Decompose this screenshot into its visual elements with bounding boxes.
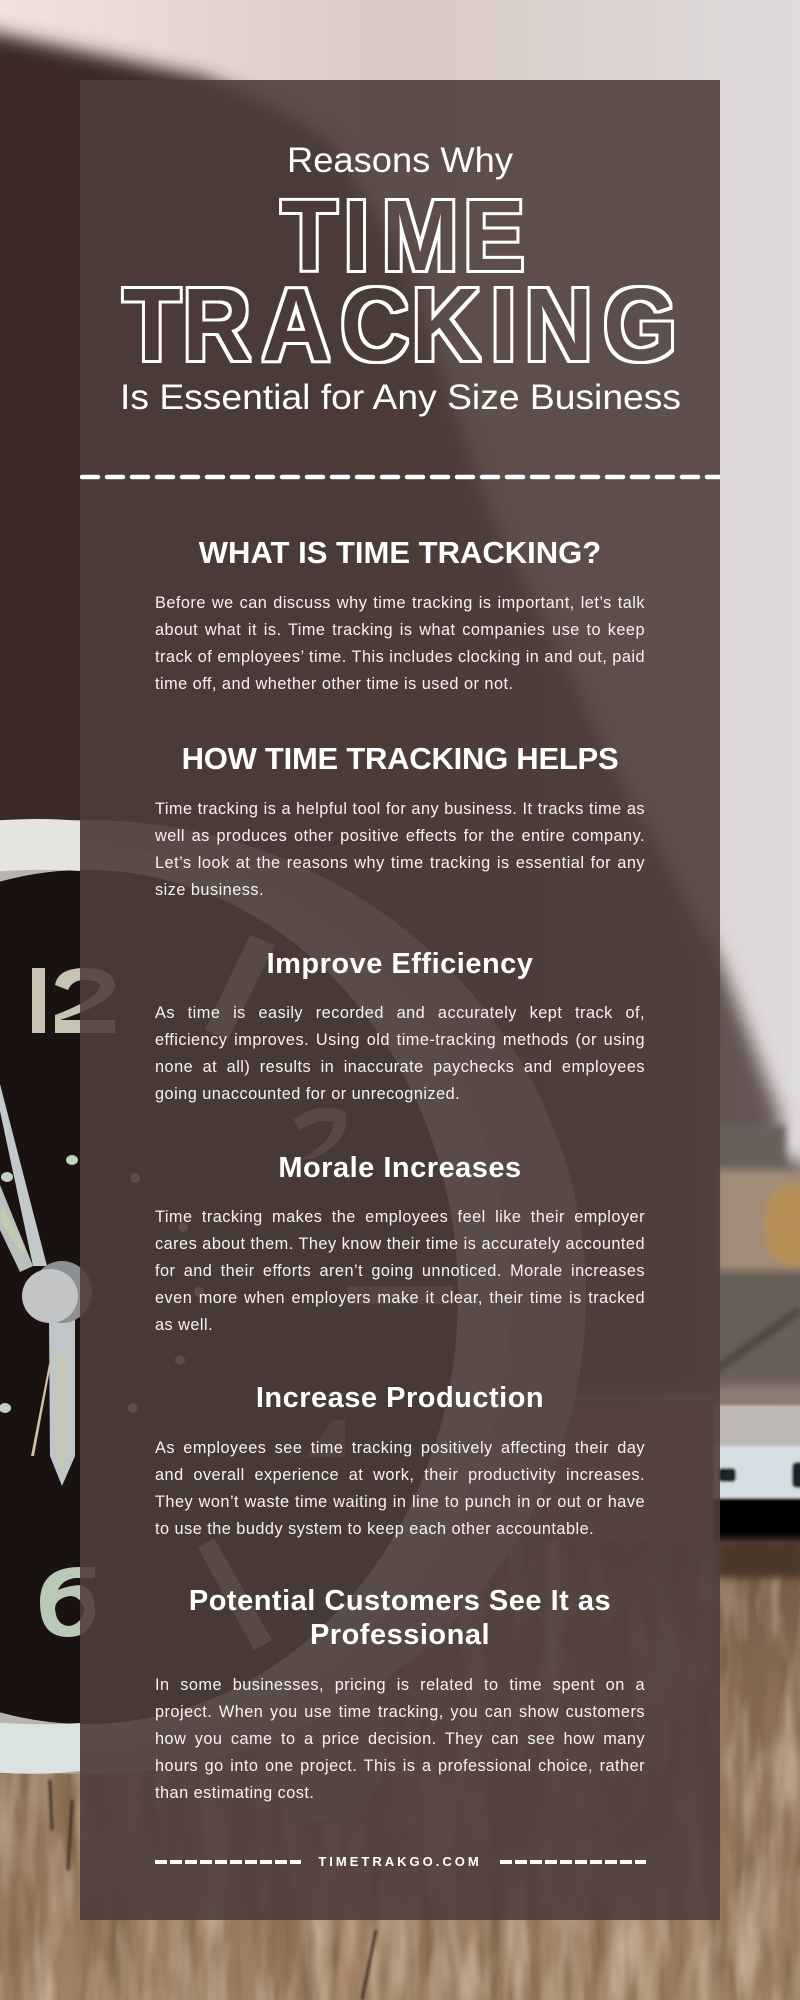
- paragraph: morale increases: even more when employers make it clear, their time is tracked: [155, 1289, 645, 1307]
- heading: morale increases: Morale Increases: [278, 1152, 522, 1184]
- paragraph: improve efficiency: As time is easily recorded and accurately kept track of,: [155, 1004, 645, 1022]
- paragraph: how time tracking helps: well as produces other positive effects for the entire company.: [155, 827, 645, 845]
- paragraph: improve efficiency: going unaccounted for or unrecognized.: [155, 1085, 460, 1103]
- paragraph: how time tracking helps: Time tracking is a helpful tool for any business. It tracks time as: [155, 800, 645, 818]
- subtitle: Is Essential for Any Size Business: [120, 378, 681, 417]
- paragraph: increase production: [155, 1439, 645, 1538]
- paragraph: improve efficiency: [155, 1004, 645, 1103]
- title: TIME outlined: TIME: [281, 180, 525, 292]
- paragraph: what is time tracking: track of employees’ time. This includes clocking in and out, paid: [155, 648, 645, 666]
- paragraph: what is time tracking: about what it is. Time tracking is what companies use to keep: [155, 621, 645, 639]
- dashed divider: [80, 474, 720, 480]
- footer dashes right: [500, 1860, 646, 1864]
- paragraph: potential customers: how you came to a price decision. They can see how many: [155, 1730, 645, 1748]
- title line: Reasons Why: Reasons Why: [287, 141, 514, 180]
- heading: how time tracking helps: HOW TIME TRACKING HELPS: [182, 741, 618, 776]
- paragraph: improve efficiency: none at all) results in inaccurate paychecks and employees: [155, 1058, 645, 1076]
- heading: potential customers: [189, 1585, 611, 1651]
- paragraph: what is time tracking: time off, and whether other time is used or not.: [155, 675, 514, 693]
- heading: increase production: Increase Production: [256, 1382, 544, 1414]
- paragraph: what is time tracking: Before we can discuss why time tracking is important, let’s talk: [155, 594, 645, 612]
- paragraph: morale increases: as well.: [155, 1316, 213, 1334]
- paragraph: increase production: They won’t waste time waiting in line to punch in or out or have: [155, 1493, 645, 1511]
- paragraph: potential customers: hours go into one project. This is a professional choice, rather: [155, 1757, 645, 1775]
- paragraph: what is time tracking: [155, 594, 645, 693]
- paragraph: potential customers: project. When you use time tracking, you can show customers: [155, 1703, 645, 1721]
- paragraph: potential customers: [155, 1676, 645, 1802]
- paragraph: how time tracking helps: Let’s look at the reasons why time tracking is essential for any: [155, 854, 645, 872]
- paragraph: morale increases: [155, 1208, 645, 1334]
- paragraph: increase production: and overall experience at work, their productivity increases.: [155, 1466, 645, 1484]
- paragraph: how time tracking helps: size business.: [155, 881, 264, 899]
- paragraph: potential customers: In some businesses, pricing is related to time spent on a: [155, 1676, 645, 1694]
- title: TRACKING outlined: TRACKING: [123, 266, 677, 382]
- heading: what is time tracking: WHAT IS TIME TRACKING?: [199, 535, 601, 570]
- paragraph: potential customers: than estimating cost.: [155, 1784, 314, 1802]
- paragraph: increase production: As employees see time tracking positively affecting their day: [155, 1439, 645, 1457]
- paragraph: morale increases: for and their efforts aren’t going unnoticed. Morale increases: [155, 1262, 645, 1280]
- footer website: TIMETRAKGO.COM: [318, 1854, 482, 1869]
- paragraph: how time tracking helps: [155, 800, 645, 899]
- footer dashes left: [155, 1860, 301, 1864]
- paragraph: morale increases: Time tracking makes the employees feel like their employer: [155, 1208, 645, 1226]
- paragraph: increase production: to use the buddy system to keep each other accountable.: [155, 1520, 594, 1538]
- heading: potential customers: Potential Customers See It as: [189, 1585, 611, 1617]
- paragraph: improve efficiency: efficiency improves. Using old time-tracking methods (or using: [155, 1031, 645, 1049]
- paragraph: morale increases: cares about them. They know their time is accurately accounted: [155, 1235, 645, 1253]
- translucent content panel: [80, 80, 720, 1920]
- title block: [120, 141, 681, 417]
- clock: [0, 819, 586, 1820]
- heading: potential customers: Professional: [310, 1619, 490, 1651]
- heading: improve efficiency: Improve Efficiency: [267, 948, 533, 980]
